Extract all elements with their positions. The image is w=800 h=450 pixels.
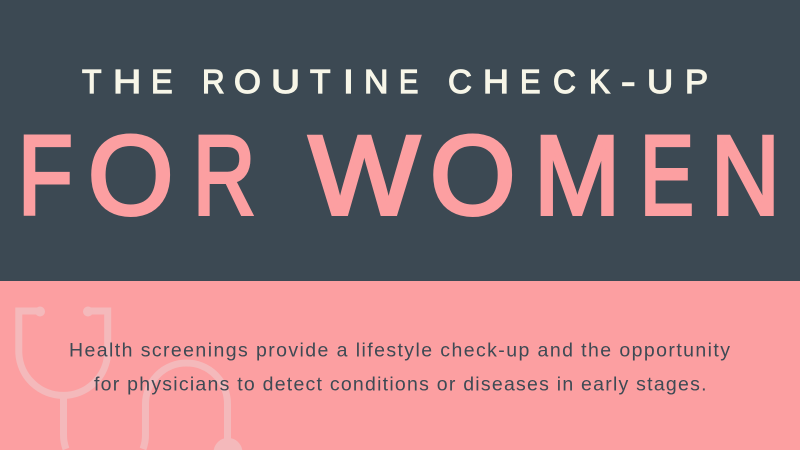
subtitle: the routine check-up: E: [151, 63, 173, 100]
title: for women: F: [18, 113, 72, 238]
subtitle: the routine check-up: H: [483, 63, 509, 100]
subtitle: the routine check-up: E: [520, 63, 540, 100]
icon: stethoscope watermark: [15, 306, 730, 450]
title: for women: W: [308, 113, 419, 238]
title: for women: M: [534, 113, 621, 238]
intro text: [69, 340, 730, 396]
title: for women: N: [711, 113, 780, 238]
subtitle: the routine check-up: T: [310, 63, 331, 100]
subtitle: the routine check-up: O: [234, 63, 261, 100]
subtitle: the routine check-up: P: [685, 63, 708, 100]
subtitle: the routine check-up: -: [621, 63, 636, 100]
subtitle: the routine check-up: K: [589, 63, 610, 100]
subtitle: the routine check-up: R: [202, 63, 225, 100]
subtitle: the routine check-up: C: [553, 63, 575, 100]
intro text: for physicians to detect conditions or diseases in early stages.: [94, 374, 706, 396]
title: for women: [18, 113, 780, 238]
subtitle: the routine check-up: [82, 63, 708, 100]
subtitle: the routine check-up: U: [271, 63, 300, 100]
panel: dark header background: [0, 0, 800, 281]
subtitle: the routine check-up: C: [448, 63, 471, 100]
subtitle: the routine check-up: E: [399, 63, 418, 100]
panel: pink intro background: [0, 281, 800, 450]
subtitle: the routine check-up: U: [647, 63, 673, 100]
title: for women: R: [193, 113, 255, 238]
title: for women: O: [430, 113, 515, 238]
subtitle: the routine check-up: H: [113, 63, 141, 100]
title: for women: O: [88, 113, 173, 238]
subtitle: the routine check-up: T: [82, 63, 102, 100]
title: for women: E: [640, 113, 694, 238]
subtitle: the routine check-up: N: [364, 63, 388, 100]
intro text: Health screenings provide a lifestyle check-up and the opportunity: [69, 340, 730, 362]
subtitle: the routine check-up: I: [343, 63, 354, 100]
